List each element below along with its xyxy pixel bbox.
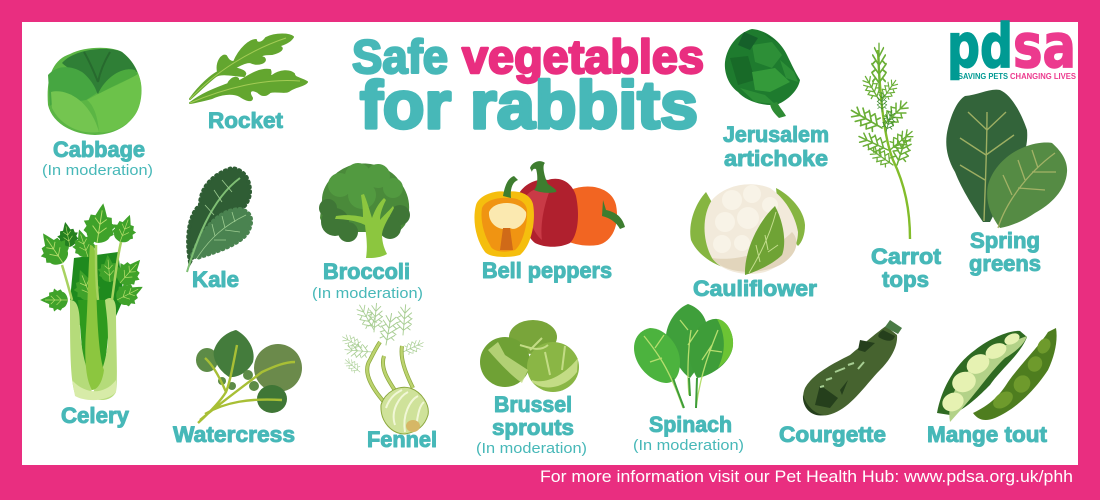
label: Bell peppers: Bell peppers [482,258,612,283]
label: Kale: Kale [192,267,239,292]
label: Spring greens [969,228,1041,276]
title: vegetables [462,30,704,83]
item: rocket [190,34,307,133]
logo: pdsa: SAVING PETS [958,72,1009,81]
icon: cauliflower [690,184,805,275]
item: brussel sprouts [476,320,587,457]
label: Spinach: Spinach [649,412,732,437]
label: Brussel sprouts: Brussel [494,392,572,417]
title: for rabbits [360,68,698,143]
icon: mange tout [937,328,1057,422]
logo: pdsa: CHANGING LIVES [1010,72,1077,81]
item: watercress [173,330,302,447]
note: in moderation: (In moderation) [476,440,587,457]
item: courgette [779,320,902,447]
icon: broccoli [319,163,410,258]
logo: pdsa [947,11,1077,82]
item: mange tout [927,328,1057,447]
label: Broccoli: Broccoli [323,259,410,284]
icon: kale [187,168,251,272]
item: spring greens [946,90,1067,276]
item: Jerusalem artichoke [723,29,829,171]
note: in moderation: (In moderation) [42,162,153,179]
label: Mange tout: Mange tout [927,422,1048,447]
label: Cauliflower: Cauliflower [693,276,817,301]
label: Carrot tops: tops [882,267,929,292]
footer text: For more information visit our Pet Health Hub: www.pdsa.org.uk/phh [540,467,1073,486]
item: cauliflower [690,184,817,301]
label: Brussel sprouts [492,392,574,440]
label: Carrot tops: Carrot [871,244,942,269]
title: Safe [352,30,448,83]
item: spinach [633,304,744,454]
item: celery [31,201,150,428]
icon: fennel [340,301,428,434]
label: Rocket: Rocket [208,108,284,133]
item: carrot tops [847,44,942,292]
label: Fennel: Fennel [367,427,437,452]
label: Jerusalem artichoke: Jerusalem [723,122,829,147]
title [352,30,704,143]
label: Carrot tops [871,244,942,292]
item: bell peppers [474,161,625,283]
item: fennel [340,301,437,452]
icon: brussel sprouts [480,320,579,392]
logo: pdsa: pd [947,11,1013,82]
icon: artichoke [725,29,800,118]
label: Courgette: Courgette [779,422,886,447]
icon: spring greens [946,90,1067,228]
icon: rocket leaves [190,34,307,103]
icon: celery [31,201,150,400]
item: cabbage [42,48,153,179]
label: Celery: Celery [61,403,130,428]
label: Jerusalem artichoke: artichoke [724,146,828,171]
item: broccoli [312,163,423,302]
logo: pdsa: sa [1013,11,1076,82]
label: Jerusalem artichoke [723,122,829,171]
label: Brussel sprouts: sprouts [492,415,574,440]
icon: spinach [634,304,733,408]
icon: carrot tops [847,44,917,239]
note: in moderation: (In moderation) [312,285,423,302]
icon: watercress [196,330,302,423]
icon: courgette [803,320,902,416]
label: Cabbage: Cabbage [53,137,145,162]
item: kale [187,168,251,292]
label: Watercress: Watercress [173,422,295,447]
label: Spring greens: Spring [970,228,1040,253]
icon: cabbage [48,48,142,135]
label: Spring greens: greens [969,251,1041,276]
icon: bell peppers [474,161,625,257]
note: in moderation: (In moderation) [633,437,744,454]
